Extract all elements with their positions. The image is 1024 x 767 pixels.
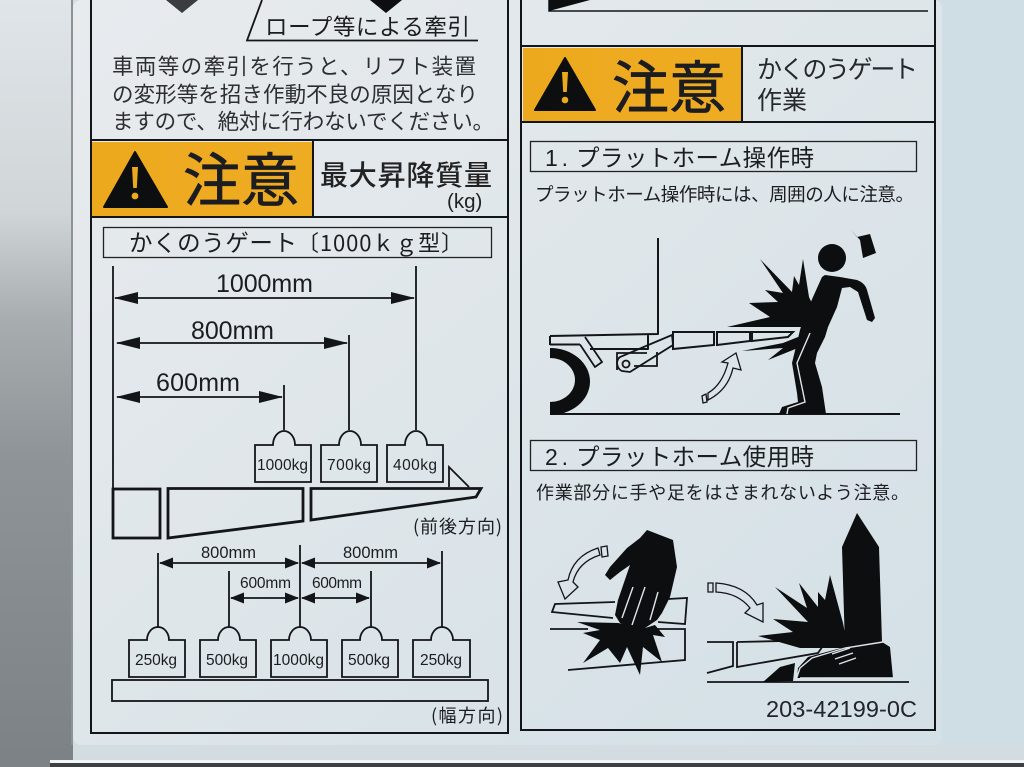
dimension: 800mm: 800mm xyxy=(191,317,274,345)
dimensions: 800mm and 600mm xyxy=(160,544,440,598)
text: towing warning: ますので、絶対に行わないでください。 xyxy=(112,105,494,136)
subheading: 1. platform operation xyxy=(530,139,916,173)
platform side view xyxy=(113,467,481,538)
weights row: 250kg xyxy=(135,652,177,669)
caption: rope towing xyxy=(247,0,478,42)
subheading: gate 1000 kg type: かくのうゲート xyxy=(129,224,297,258)
weights row: 1000kg xyxy=(273,652,324,669)
illustration: foot pinched xyxy=(707,513,909,682)
weights row: 500kg xyxy=(206,652,248,669)
text: towing warning: の変形等を招き作動不良の原因となり xyxy=(112,78,478,109)
icon: warning triangle xyxy=(104,152,167,207)
dimension: 600mm: 600mm xyxy=(156,369,240,397)
arrow: upward motion xyxy=(702,353,741,403)
person silhouette xyxy=(779,275,875,414)
panel: left column frame xyxy=(91,0,508,733)
subheading: 2. platform use xyxy=(530,438,916,472)
header: caution, maximum lift mass: 注意 xyxy=(183,134,299,218)
text: towing warning xyxy=(112,50,494,136)
subheading: 2. platform use: 2. xyxy=(545,444,568,470)
subheading: 2. platform use: プラットホーム使用時 xyxy=(576,438,814,472)
text: towing warning: 車両等の牽引を行うと、リフト装置 xyxy=(112,50,476,81)
part number: 203-42199-0C xyxy=(766,696,917,722)
header: caution, maximum lift mass xyxy=(92,134,492,218)
header: caution, gate operation xyxy=(523,43,918,125)
weight: 700kg xyxy=(321,431,377,482)
subheading: gate 1000 kg type: 〔1000ｋｇ型〕 xyxy=(297,226,463,258)
dimensions: 800mm and 600mm: 600mm xyxy=(312,575,362,592)
dimensions: 800mm and 600mm: 600mm xyxy=(240,575,291,592)
weight: 400kg: 400kg xyxy=(393,457,437,474)
chart: lateral load diagram: (幅方向) xyxy=(431,702,503,728)
boot silhouette xyxy=(797,513,893,678)
weights row: 250kg xyxy=(420,652,462,669)
dimensions: 800mm and 600mm: 800mm xyxy=(343,544,398,562)
icon: partial warning diamonds at top xyxy=(166,0,402,13)
header: caution, gate operation: 作業 xyxy=(757,81,807,117)
header: caution, gate operation: 注意 xyxy=(612,43,726,125)
dimensions: 800mm and 600mm: 800mm xyxy=(201,544,256,562)
text: operation caution: プラットホーム操作時には、周囲の人に注意。 xyxy=(535,181,914,207)
header: caution, maximum lift mass: 最大昇降質量 xyxy=(320,154,492,194)
hat xyxy=(850,229,876,258)
illustration: hand pinched xyxy=(550,530,687,675)
subheading: 1. platform operation: 1. xyxy=(545,145,568,171)
weights row xyxy=(129,627,470,677)
chart: lateral load diagram xyxy=(112,544,503,728)
caption: rope towing: ロープ等による牽引 xyxy=(265,10,470,42)
truck body and lift mechanism xyxy=(550,238,900,415)
weight: 1000kg xyxy=(255,431,311,482)
weight: 1000kg: 1000kg xyxy=(257,457,308,474)
illustration: person struck by platform xyxy=(550,229,900,415)
header: caution, maximum lift mass: (kg) xyxy=(447,190,482,213)
hand silhouette xyxy=(605,530,677,628)
subheading: gate 1000 kg type xyxy=(104,224,492,258)
chart: longitudinal load diagram xyxy=(113,266,502,539)
chart: longitudinal load diagram: (前後方向) xyxy=(413,513,502,539)
text: usage caution: 作業部分に手や足をはさまれないよう注意。 xyxy=(536,479,909,505)
header: caution, gate operation: かくのうゲート xyxy=(757,50,918,86)
weight: 400kg xyxy=(387,431,443,482)
panel: right column frame xyxy=(521,0,935,730)
weight: 700kg: 700kg xyxy=(327,457,371,474)
weights row: 500kg xyxy=(348,652,390,669)
platform front view xyxy=(112,680,488,701)
icon: warning triangle xyxy=(535,58,595,110)
subheading: 1. platform operation: プラットホーム操作時 xyxy=(576,139,814,173)
dimension: 1000mm: 1000mm xyxy=(216,270,313,298)
explosion mark xyxy=(727,259,815,360)
